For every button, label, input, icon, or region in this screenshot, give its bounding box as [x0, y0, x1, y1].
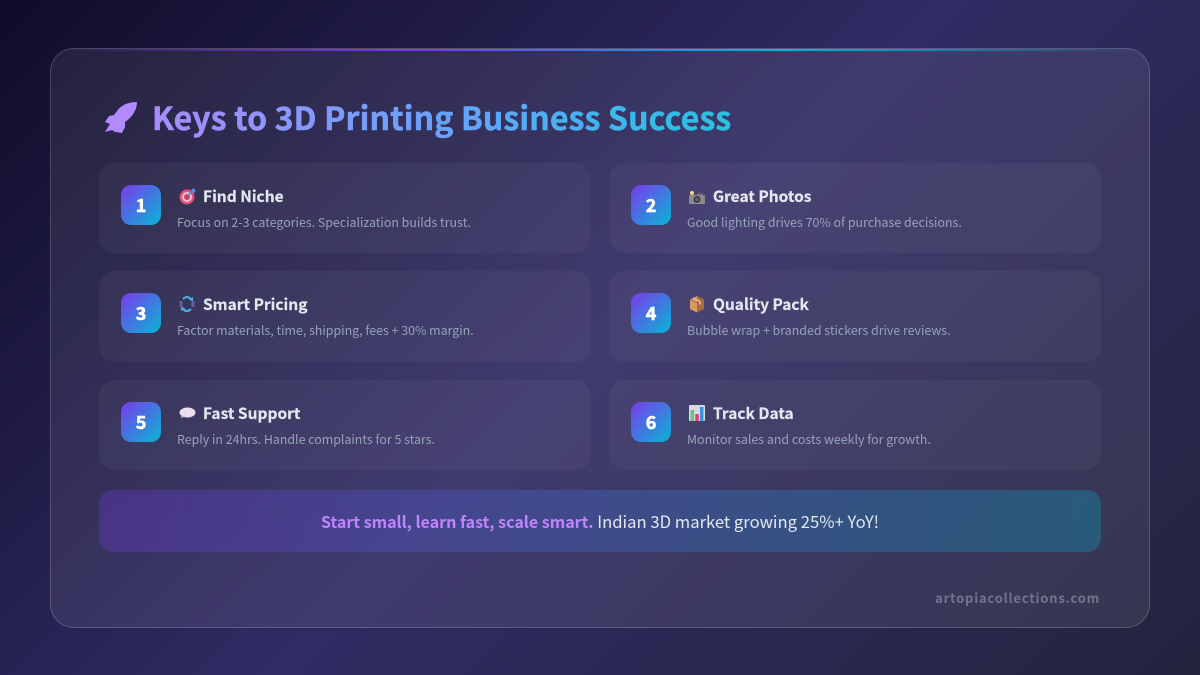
step number 6 [631, 402, 671, 442]
description: Bubble wrap + branded stickers drive reviews. [687, 321, 951, 339]
card 4: quality pack [609, 271, 1101, 362]
icon: target [180, 188, 196, 204]
card 2: great photos [609, 163, 1101, 253]
step number 2 [631, 185, 671, 225]
step number 1: 1 [136, 192, 146, 218]
icon: rocket [105, 102, 137, 133]
heading: Fast Support [203, 402, 300, 424]
icon: camera with flash [689, 191, 705, 204]
heading: Quality Pack [713, 293, 809, 315]
heading: Track Data [713, 402, 794, 424]
step number 6: 6 [646, 409, 656, 435]
heading: Find Niche [203, 185, 284, 207]
description: Factor materials, time, shipping, fees + 30% margin. [177, 321, 474, 339]
heading: Smart Pricing [203, 293, 307, 315]
step number 3: 3 [136, 300, 146, 326]
panel: main glass card [50, 48, 1150, 628]
icon: bar chart [689, 405, 705, 421]
step number 4: 4 [646, 300, 656, 326]
description: Good lighting drives 70% of purchase decisions. [687, 213, 962, 231]
icon: currency exchange [180, 296, 194, 312]
icon: speech bubble [180, 408, 196, 418]
card 5: fast support [99, 380, 591, 470]
description: Reply in 24hrs. Handle complaints for 5 stars. [177, 430, 435, 448]
step number 5 [121, 402, 161, 442]
step number 5: 5 [136, 409, 146, 435]
card 3: smart pricing [99, 271, 591, 362]
heading: Great Photos [713, 185, 811, 207]
step number 3 [121, 293, 161, 333]
callout banner [99, 490, 1101, 552]
description: Monitor sales and costs weekly for growth. [687, 430, 931, 448]
card 6: track data [609, 380, 1101, 470]
step number 2: 2 [646, 192, 656, 218]
description: Focus on 2-3 categories. Specialization builds trust. [177, 213, 471, 231]
step number 1 [121, 185, 161, 225]
footer website: artopiacollections.com [935, 588, 1100, 607]
callout banner: Start small, learn fast, scale smart. Indian 3D market growing 25%+ YoY! [321, 509, 879, 533]
title: Keys to 3D Printing Business Success [152, 94, 731, 140]
step number 4 [631, 293, 671, 333]
icon: package [690, 296, 704, 312]
card 1: find niche [99, 163, 591, 253]
